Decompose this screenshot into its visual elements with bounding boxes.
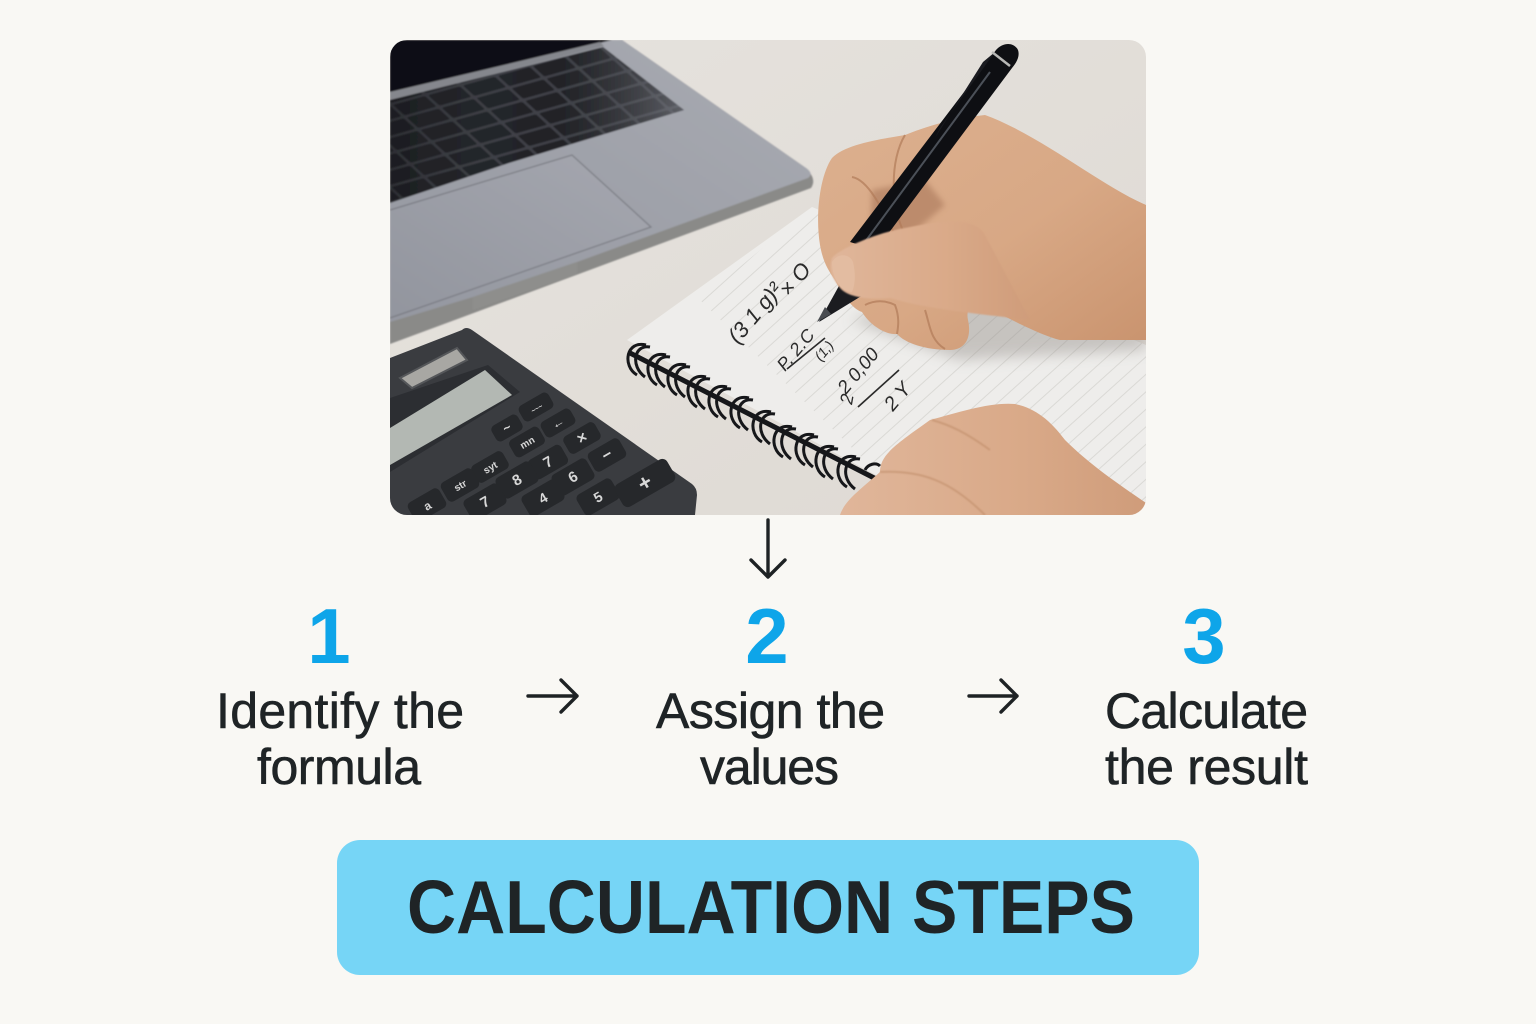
handwritten maths xyxy=(730,263,908,412)
handwritten maths: 2 xyxy=(836,392,858,407)
calculator keys: ~~~ xyxy=(530,403,544,415)
handwritten maths: (3 1 g)² xyxy=(723,277,788,348)
thumb xyxy=(830,224,1008,318)
step 1 xyxy=(216,592,464,795)
lower hand xyxy=(840,404,1146,515)
step 1 label: Identify the xyxy=(216,683,464,739)
calculator keys: + xyxy=(633,469,657,497)
calculator keys: × xyxy=(574,429,591,448)
desk surface xyxy=(390,40,1146,515)
laptop xyxy=(390,40,813,344)
calculator keys: mn xyxy=(519,435,537,452)
writing hand back xyxy=(818,115,1146,350)
step 1 label: formula xyxy=(257,739,421,795)
shaded palm behind pen xyxy=(869,181,945,232)
calculator keys: 5 xyxy=(591,488,606,506)
lower hand knuckle shading xyxy=(880,420,990,515)
step 1 number: 1 xyxy=(307,592,351,680)
handwritten maths: (1,) xyxy=(811,338,837,364)
calculator keys: ~ xyxy=(500,419,514,436)
arrow: step 2 to 3 xyxy=(969,680,1017,712)
step 2 label: values xyxy=(700,739,839,795)
step 3 number: 3 xyxy=(1182,592,1226,680)
spiral binding xyxy=(628,344,880,489)
handwritten maths: × O xyxy=(774,258,816,301)
calculator keys: 7 xyxy=(540,453,556,472)
step 2 xyxy=(656,592,885,795)
handwritten maths: P. 2.C xyxy=(773,324,819,375)
step 3 label: the result xyxy=(1105,739,1308,795)
handwritten maths: 2 0,00 xyxy=(833,344,884,399)
photo: laptop, calculator and hands writing in notebook xyxy=(390,40,1146,524)
step 2 number: 2 xyxy=(745,592,789,680)
finger creases xyxy=(852,135,945,349)
step 3 xyxy=(1105,592,1308,795)
calculator keys: a xyxy=(421,498,434,514)
banner title: CALCULATION STEPS xyxy=(407,865,1135,949)
hand shadow xyxy=(854,312,1146,366)
calculator keys: − xyxy=(599,446,616,465)
calculator keys: 4 xyxy=(536,489,551,507)
step 2 label: Assign the xyxy=(656,683,885,739)
notebook xyxy=(627,207,1146,515)
arrow: step 1 to 2 xyxy=(528,680,577,712)
step 3 label: Calculate xyxy=(1105,683,1308,739)
calculator keys: 8 xyxy=(509,471,525,490)
pen xyxy=(817,44,1019,322)
title banner xyxy=(337,840,1199,975)
calculator keys: str xyxy=(452,478,469,494)
thumbnail highlight xyxy=(836,256,854,292)
arrow: photo down to steps xyxy=(751,520,785,577)
calculator keys: 6 xyxy=(565,468,581,487)
calculator keys: ← xyxy=(548,413,567,432)
calculator xyxy=(390,328,697,524)
calculator keys: syt xyxy=(482,460,500,477)
calculator keys: 7 xyxy=(477,493,493,512)
calculator keys xyxy=(406,391,677,524)
handwritten maths: 2 Y xyxy=(879,377,917,416)
